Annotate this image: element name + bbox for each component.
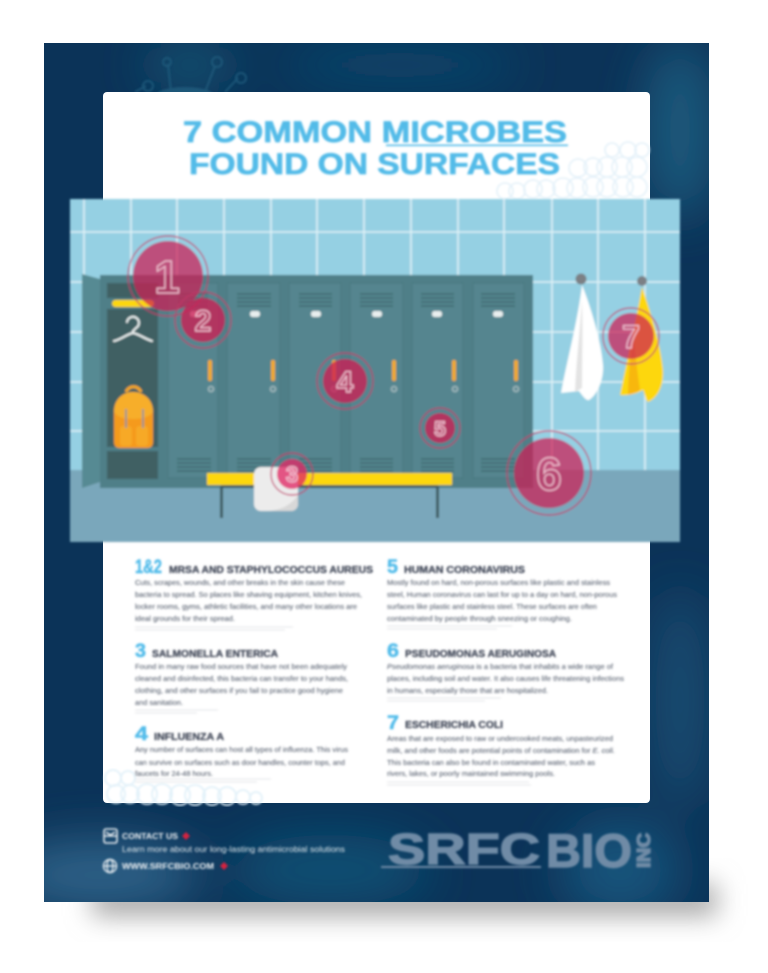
lockers: [82, 274, 533, 488]
locker labels: [190, 311, 503, 317]
locker vents: [177, 294, 515, 471]
text block: Escherichia coli: rivers, lakes, or poorly maintained swimming pools.: [387, 769, 555, 778]
marker 7: [603, 308, 659, 364]
illustration: locker room: [70, 199, 680, 542]
icon: backpack: [114, 387, 153, 448]
text block: Influenza A: 4: [135, 724, 149, 745]
drop shadow: [92, 884, 717, 916]
marker 4: [317, 353, 373, 409]
text block: Pseudomonas aeruginosa: Pseudomonas aeruginosa is a bacteria that inhabits a wide range of: [387, 662, 614, 671]
logo: SRFC BIO INC: INC: [634, 833, 654, 868]
text block: Influenza A: can survive on surfaces such as door handles, counter tops, and: [135, 758, 345, 767]
title: FOUND ON SURFACES: [189, 148, 560, 181]
hooks: [576, 274, 647, 286]
logo: SRFC BIO INC: [381, 824, 654, 877]
icon: faint virus silhouette: [135, 56, 248, 92]
marker 3: [271, 453, 313, 495]
text block: Influenza A: [135, 724, 348, 782]
icon: globe: [104, 860, 116, 872]
marker 4: 4: [337, 366, 354, 399]
decorative ring pattern, top right: [497, 142, 649, 199]
text block: Escherichia coli: 7: [387, 713, 399, 734]
text block: Salmonella enterica: clothing, and other surfaces if you fail to practice good hygiene: [135, 686, 343, 695]
text block: Salmonella enterica: 3: [135, 641, 146, 662]
locker handles: [208, 360, 518, 381]
icon: red arrow: [220, 862, 228, 870]
text block: Pseudomonas aeruginosa: 6: [387, 641, 399, 662]
text block: MRSA and Staphylococcus aureus: locker rooms, gyms, athletic facilities, and many other locations are: [135, 602, 357, 611]
marker 6: 6: [536, 448, 562, 500]
text block: MRSA and Staphylococcus aureus: ideal grounds for their spread.: [135, 614, 235, 623]
text block: Salmonella enterica: Found in many raw food sources that have not been adequately: [135, 662, 347, 671]
footer contact block: WWW.SRFCBIO.COM: [122, 862, 214, 871]
text block: Human coronavirus: contaminated by people through sneezing or coughing.: [387, 614, 572, 623]
text block: Influenza A: Any number of surfaces can host all types of influenza. This virus: [135, 745, 348, 754]
text block: Human coronavirus: [387, 557, 617, 629]
text block: Salmonella enterica: cleaned and disinfected, this bacteria can transfer to your hands,: [135, 674, 348, 683]
text block: Escherichia coli: This bacteria can also be found in contaminated water, such as: [387, 758, 595, 767]
text block: Human coronavirus: 5: [387, 557, 398, 578]
marker 2: [175, 292, 231, 348]
icon: red arrow: [182, 832, 190, 840]
bench: [207, 473, 452, 518]
marker 5: 5: [434, 418, 446, 441]
title: 7 COMMON MICROBES: [183, 116, 567, 149]
decorative ring pattern, bottom left: [105, 770, 262, 805]
text block: Escherichia coli: [387, 713, 615, 785]
footer contact block: CONTACT US: [122, 832, 179, 841]
folded towel: [254, 467, 298, 511]
locker doors: [168, 283, 524, 478]
open locker door: [82, 274, 100, 488]
panel: white content sheet: [103, 92, 650, 805]
open locker interior: [107, 283, 158, 479]
marker 3: 3: [286, 462, 298, 487]
marker 7: 7: [622, 319, 640, 355]
text block: Influenza A: INFLUENZA A: [154, 732, 224, 743]
text block: MRSA and Staphylococcus aureus: 1&2: [135, 557, 162, 578]
text block: Human coronavirus: steel, Human coronavirus can last for up to a day on hard, non-porous: [387, 590, 617, 599]
tile wall: [70, 199, 680, 542]
footer contact block: [104, 829, 345, 872]
text block: Pseudomonas aeruginosa: [387, 641, 624, 701]
white hanging towel: [561, 285, 603, 400]
text block: Influenza A: faucets for 24-48 hours.: [135, 769, 213, 778]
text block: Pseudomonas aeruginosa: PSEUDOMONAS AERUGINOSA: [405, 649, 556, 660]
yellow hanging towel: [620, 287, 663, 402]
marker 1: 1: [154, 251, 180, 303]
text block: Pseudomonas aeruginosa: places, including soil and water. It also causes life threatening infections: [387, 674, 624, 683]
marker 1: [128, 236, 208, 316]
text block: Salmonella enterica: and sanitation.: [135, 698, 183, 707]
footer contact block: Learn more about our long-lasting antimicrobial solutions: [122, 845, 345, 854]
text block: MRSA and Staphylococcus aureus: [135, 557, 373, 630]
text block: MRSA and Staphylococcus aureus: bacteria to spread. So places like shaving equipment, kitchen knives,: [135, 590, 362, 599]
locker knobs: [208, 386, 518, 392]
text block: Human coronavirus: HUMAN CORONAVIRUS: [404, 565, 525, 576]
text block: Pseudomonas aeruginosa: in humans, especially those that are hospitalized.: [387, 686, 548, 695]
marker 6: [507, 431, 591, 515]
floor: [70, 470, 680, 542]
logo: SRFC BIO INC: SRFC: [388, 825, 540, 874]
text block: Salmonella enterica: [135, 641, 348, 713]
text block: Human coronavirus: Mostly found on hard, non-porous surfaces like plastic and stainless: [387, 578, 610, 587]
title: [183, 116, 568, 181]
icon: coat hanger: [114, 317, 152, 341]
text block: Escherichia coli: Areas that are exposed to raw or undercooked meats, unpasteurized: [387, 734, 613, 743]
text block: Human coronavirus: surfaces like plastic and stainless steel. These surfaces are often: [387, 602, 597, 611]
marker 2: 2: [195, 305, 211, 338]
text block: Escherichia coli: milk, and other foods are potential points of contamination for E. coli.: [387, 746, 615, 755]
text block: Escherichia coli: ESCHERICHIA COLI: [405, 720, 503, 731]
text block: MRSA and Staphylococcus aureus: MRSA AND STAPHYLOCOCCUS AUREUS: [169, 565, 373, 576]
text block: MRSA and Staphylococcus aureus: Cuts, scrapes, wounds, and other breaks in the skin cause these: [135, 578, 345, 587]
logo: SRFC BIO INC: BIO: [546, 824, 632, 877]
text block: Salmonella enterica: SALMONELLA ENTERICA: [152, 649, 278, 660]
icon: envelope: [104, 829, 117, 843]
marker 5: [420, 408, 460, 448]
